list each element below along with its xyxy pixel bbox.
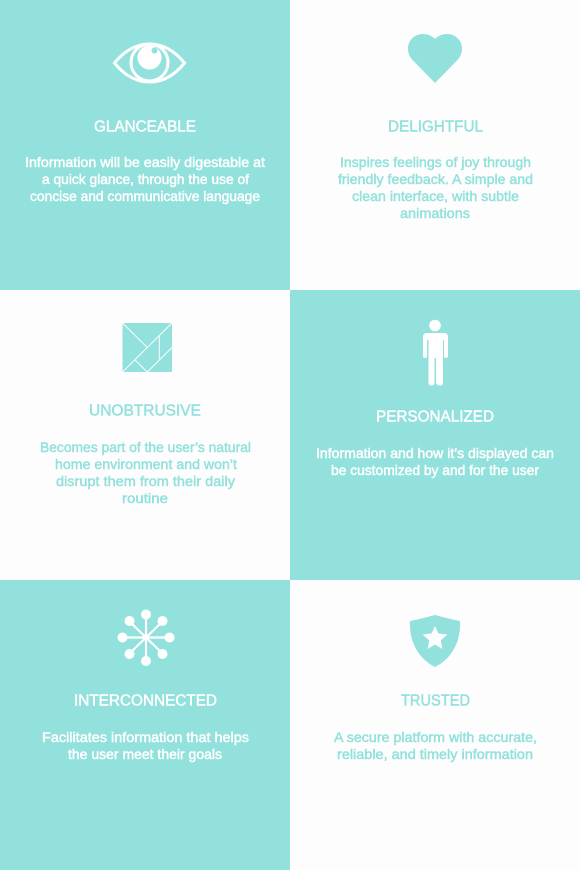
text: trusted description: reliable, and timely information [337, 746, 533, 762]
text: interconnected description [42, 729, 249, 762]
panel: interconnected [0, 580, 290, 870]
text: glanceable description [25, 154, 265, 204]
heading: unobtrusive: UNOBTRUSIVE [89, 402, 201, 420]
icon: eye [114, 44, 184, 82]
text: glanceable description: Information will be easily digestable at [25, 154, 265, 170]
panel: glanceable [0, 0, 290, 290]
text: delightful description: friendly feedback. A simple and [338, 171, 533, 187]
heading: glanceable: GLANCEABLE [94, 118, 196, 136]
text: personalized description: be customized by and for the user [331, 462, 539, 478]
heading: personalized: PERSONALIZED [376, 408, 494, 426]
icon: connected nodes [118, 610, 174, 666]
heading: delightful: DELIGHTFUL [388, 118, 483, 136]
text: delightful description: Inspires feelings of joy through [340, 154, 531, 170]
text: delightful description [338, 154, 533, 221]
text: unobtrusive description: disrupt them from their daily [56, 473, 235, 489]
text: glanceable description: concise and communicative language [30, 188, 260, 204]
icon: person [423, 320, 448, 386]
text: trusted description: A secure platform with accurate, [334, 729, 537, 745]
text: glanceable description: a quick glance, through the use of [42, 171, 249, 187]
panel: unobtrusive [40, 323, 251, 506]
text: personalized description: Information and how it’s displayed can [316, 445, 554, 461]
text: personalized description [316, 445, 554, 478]
panel: personalized [290, 290, 580, 580]
panel: delightful [338, 34, 533, 221]
text: interconnected description: the user meet their goals [68, 746, 222, 762]
text: unobtrusive description: Becomes part of the user’s natural [40, 439, 251, 455]
text: interconnected description: Facilitates information that helps [42, 729, 249, 745]
icon: tangram square [122, 323, 172, 372]
text: unobtrusive description: home environment and won’t [55, 456, 237, 472]
text: delightful description: animations [400, 205, 470, 221]
text: unobtrusive description: routine [122, 490, 168, 506]
text: trusted description [334, 729, 537, 762]
icon: shield with star [410, 615, 460, 667]
panel: trusted [334, 615, 537, 762]
text: unobtrusive description [40, 439, 251, 506]
icon: heart [408, 34, 462, 83]
heading: trusted: TRUSTED [401, 692, 470, 710]
heading: interconnected: INTERCONNECTED [74, 692, 217, 710]
text: delightful description: clean interface, with subtle [352, 188, 519, 204]
